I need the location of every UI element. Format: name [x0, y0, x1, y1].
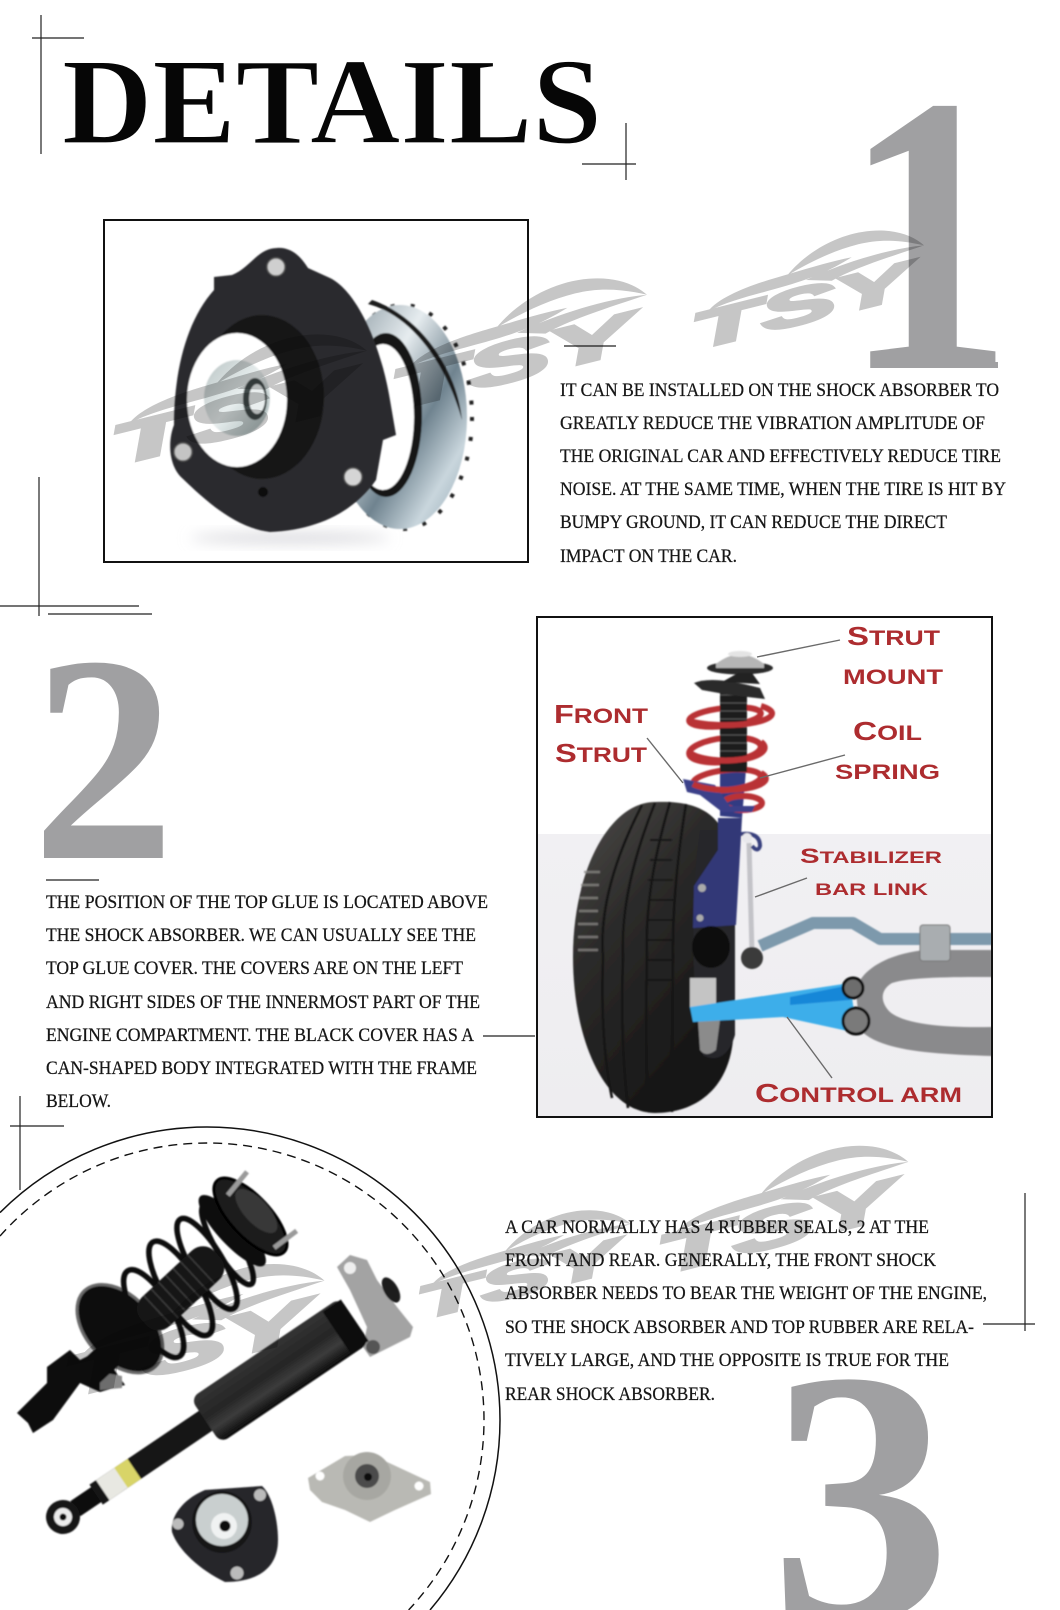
clamp — [920, 925, 950, 961]
frame — [537, 617, 992, 1117]
frame — [104, 220, 528, 562]
icon: coil-over strut — [17, 1154, 313, 1433]
icon: control arm — [690, 983, 857, 1033]
watermark: over strut — [49, 1250, 340, 1409]
wheel interior — [694, 924, 736, 1058]
labels: FRONT — [554, 699, 648, 729]
watermark: upper right — [678, 218, 938, 360]
labels: STRUT — [847, 621, 940, 651]
icon: black mount — [172, 1486, 278, 1582]
text block 2: TOP GLUE COVER. THE COVERS ARE ON THE LEFT — [46, 958, 463, 979]
text block 1 — [560, 380, 1006, 567]
dashed circle — [0, 1143, 484, 1610]
icon: stabilizer link — [749, 843, 752, 953]
watermark: upper right: TSY — [686, 249, 927, 360]
panel: suspension diagram — [537, 617, 992, 1117]
numeral 2: 2 — [32, 595, 175, 922]
boot — [692, 926, 730, 968]
text block 3: FRONT AND REAR. GENERALLY, THE FRONT SHOCK — [505, 1250, 936, 1271]
text block 1: THE ORIGINAL CAR AND EFFECTIVELY REDUCE TIRE — [560, 446, 1001, 467]
text block 3: SO THE SHOCK ABSORBER AND TOP RUBBER ARE RELA- — [505, 1317, 974, 1338]
lower background — [538, 834, 991, 1116]
leader lines — [647, 640, 845, 1078]
watermark: upper middle: TSY — [385, 299, 648, 421]
text block 1: BUMPY GROUND, IT CAN REDUCE THE DIRECT — [560, 512, 947, 533]
labels: BAR LINK — [815, 880, 929, 899]
watermark: lower right: TSY — [651, 1167, 911, 1286]
watermark: over mount: TSY — [105, 355, 368, 477]
icon: coil spring back — [688, 704, 762, 810]
text block 3 — [505, 1217, 987, 1405]
labels — [554, 621, 962, 1108]
watermark: lower middle — [405, 1199, 643, 1329]
text block 3: TIVELY LARGE, AND THE OPPOSITE IS TRUE FOR THE — [505, 1350, 949, 1371]
labels: STRUT — [555, 738, 647, 768]
text block 2: BELOW. — [46, 1091, 111, 1112]
subframe — [856, 950, 992, 1056]
text block 3: REAR SHOCK ABSORBER. — [505, 1384, 715, 1405]
shadow — [190, 533, 390, 543]
labels: SPRING — [835, 761, 940, 784]
text block 1: IMPACT ON THE CAR. — [560, 546, 737, 567]
watermark: lower middle: TSY — [411, 1227, 633, 1329]
text block 3: A CAR NORMALLY HAS 4 RUBBER SEALS, 2 AT THE — [505, 1217, 929, 1238]
icon: threaded rod — [720, 687, 747, 772]
panel: strut mount photo — [104, 220, 528, 562]
labels: C ONTROL ARM — [755, 1078, 962, 1108]
text block 1: IT CAN BE INSTALLED ON THE SHOCK ABSORBER TO — [560, 380, 999, 401]
icon: rubber flange — [170, 248, 396, 532]
stabilizer bar — [760, 923, 992, 946]
labels: S TABILIZER — [800, 845, 942, 868]
icon: tire — [573, 802, 733, 1113]
spring perch — [683, 779, 755, 812]
text block 2: CAN-SHAPED BODY INTEGRATED WITH THE FRAME — [46, 1058, 477, 1079]
labels: C OIL — [853, 716, 922, 746]
strut body — [693, 818, 742, 928]
text block 2 — [46, 892, 488, 1112]
icon: coil spring front — [690, 706, 772, 790]
icon: metal spring plate — [333, 300, 472, 529]
numeral 1: 1 — [843, 14, 1013, 454]
text block 2: ENGINE COMPARTMENT. THE BLACK COVER HAS A — [46, 1025, 474, 1046]
watermark: over strut: TSY — [57, 1285, 326, 1409]
labels: MOUNT — [843, 666, 943, 689]
solid circle — [0, 1127, 500, 1610]
icon: grey mount — [308, 1452, 431, 1522]
text block 3: ABSORBER NEEDS TO BEAR THE WEIGHT OF THE ENGINE, — [505, 1283, 987, 1304]
title: DETAILS — [62, 33, 602, 170]
watermark: lower right — [643, 1132, 923, 1286]
watermark: over mount — [97, 320, 382, 477]
text block 1: NOISE. AT THE SAME TIME, WHEN THE TIRE IS HIT BY — [560, 479, 1006, 500]
panel: circular product group — [0, 1127, 500, 1610]
text block 2: THE POSITION OF THE TOP GLUE IS LOCATED ABOVE — [46, 892, 488, 913]
text block 2: AND RIGHT SIDES OF THE INNERMOST PART OF THE — [46, 992, 480, 1013]
text block 1: GREATLY REDUCE THE VIBRATION AMPLITUDE OF — [560, 413, 985, 434]
icon: top mount — [694, 680, 765, 699]
watermark: upper middle — [377, 264, 662, 421]
icon: shock absorber — [34, 1255, 413, 1549]
text block 2: THE SHOCK ABSORBER. WE CAN USUALLY SEE THE — [46, 925, 476, 946]
